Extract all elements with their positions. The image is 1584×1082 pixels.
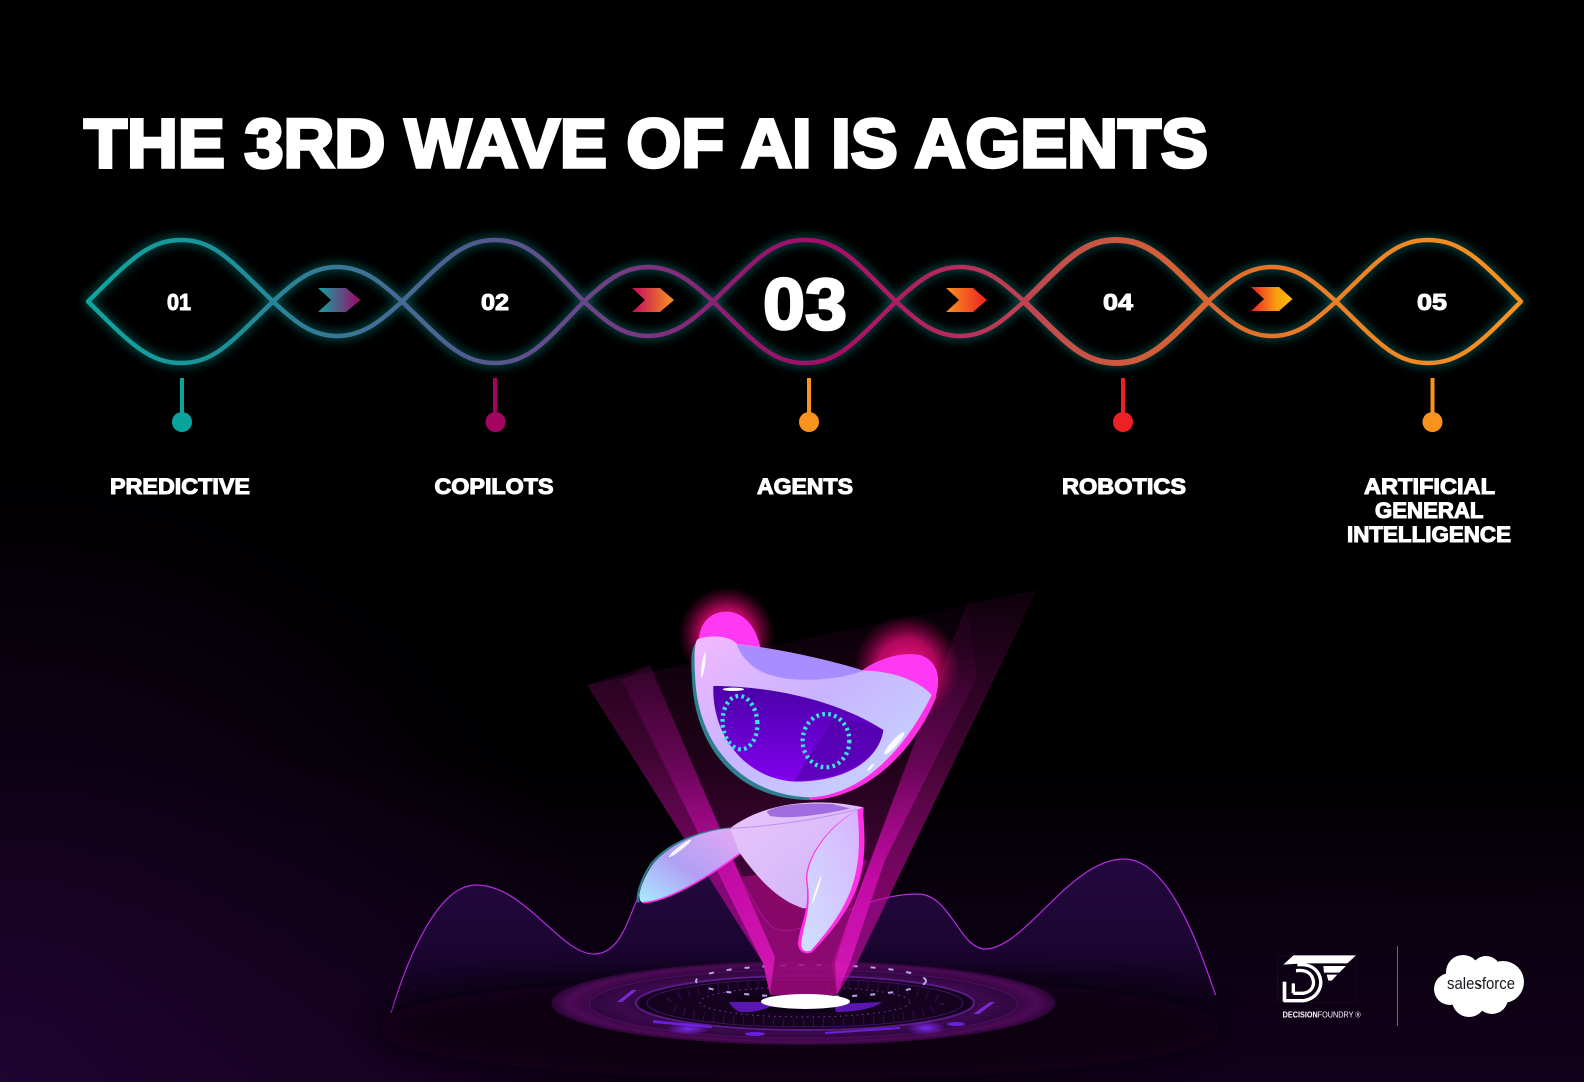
arrow: 02 to 03	[632, 288, 674, 312]
marker: copilots	[486, 378, 506, 432]
marker: agents	[799, 378, 819, 432]
robot leg	[798, 807, 864, 953]
hills behind robot	[391, 838, 1216, 1045]
dark floor shadow	[375, 976, 1225, 1080]
arrow: 03 to 04	[946, 288, 987, 312]
step numbers: 05	[1417, 289, 1447, 315]
logo: salesforce: salesforce	[1447, 975, 1515, 993]
label: copilots: COPILOTS	[434, 474, 554, 499]
platform light source	[761, 994, 850, 1009]
marker: predictive	[172, 378, 192, 432]
step numbers: 01	[167, 289, 191, 315]
arrow: 04 to 05	[1251, 287, 1292, 311]
marker: robotics	[1113, 378, 1133, 432]
step numbers	[167, 265, 1447, 345]
label: artificial general intelligence	[1347, 474, 1511, 547]
robot mascot	[638, 587, 960, 953]
timeline wave	[88, 240, 1521, 363]
step numbers: 04	[1103, 289, 1133, 315]
label: agents: AGENTS	[757, 474, 853, 499]
step numbers: 03	[763, 265, 847, 345]
robot torso	[730, 802, 863, 908]
logo wordmark: DECISIONFOUNDRY ®	[1283, 1010, 1361, 1019]
arrow: 01 to 02	[318, 288, 360, 312]
logo: salesforce	[1434, 955, 1524, 1017]
light beams	[587, 590, 1037, 995]
robot eyes	[721, 695, 849, 767]
robot head	[691, 637, 937, 800]
step numbers: 02	[481, 289, 509, 315]
holographic platform	[552, 961, 1056, 1045]
robot arm	[638, 828, 743, 903]
divider line	[1397, 946, 1398, 1026]
label: artificial general intelligence: ARTIFICIAL	[1364, 474, 1495, 499]
robot ear glow	[678, 587, 960, 722]
label: predictive: PREDICTIVE	[110, 474, 250, 499]
label: artificial general intelligence: GENERAL	[1375, 498, 1484, 523]
marker: artificial general intelligence	[1422, 378, 1442, 432]
label: robotics: ROBOTICS	[1062, 474, 1186, 499]
title: THE 3RD WAVE OF AI IS AGENTS	[84, 105, 1208, 182]
label: artificial general intelligence: INTELLIGENCE	[1347, 522, 1511, 547]
logo: decision foundry	[1272, 955, 1361, 1019]
robot ears	[698, 612, 938, 697]
